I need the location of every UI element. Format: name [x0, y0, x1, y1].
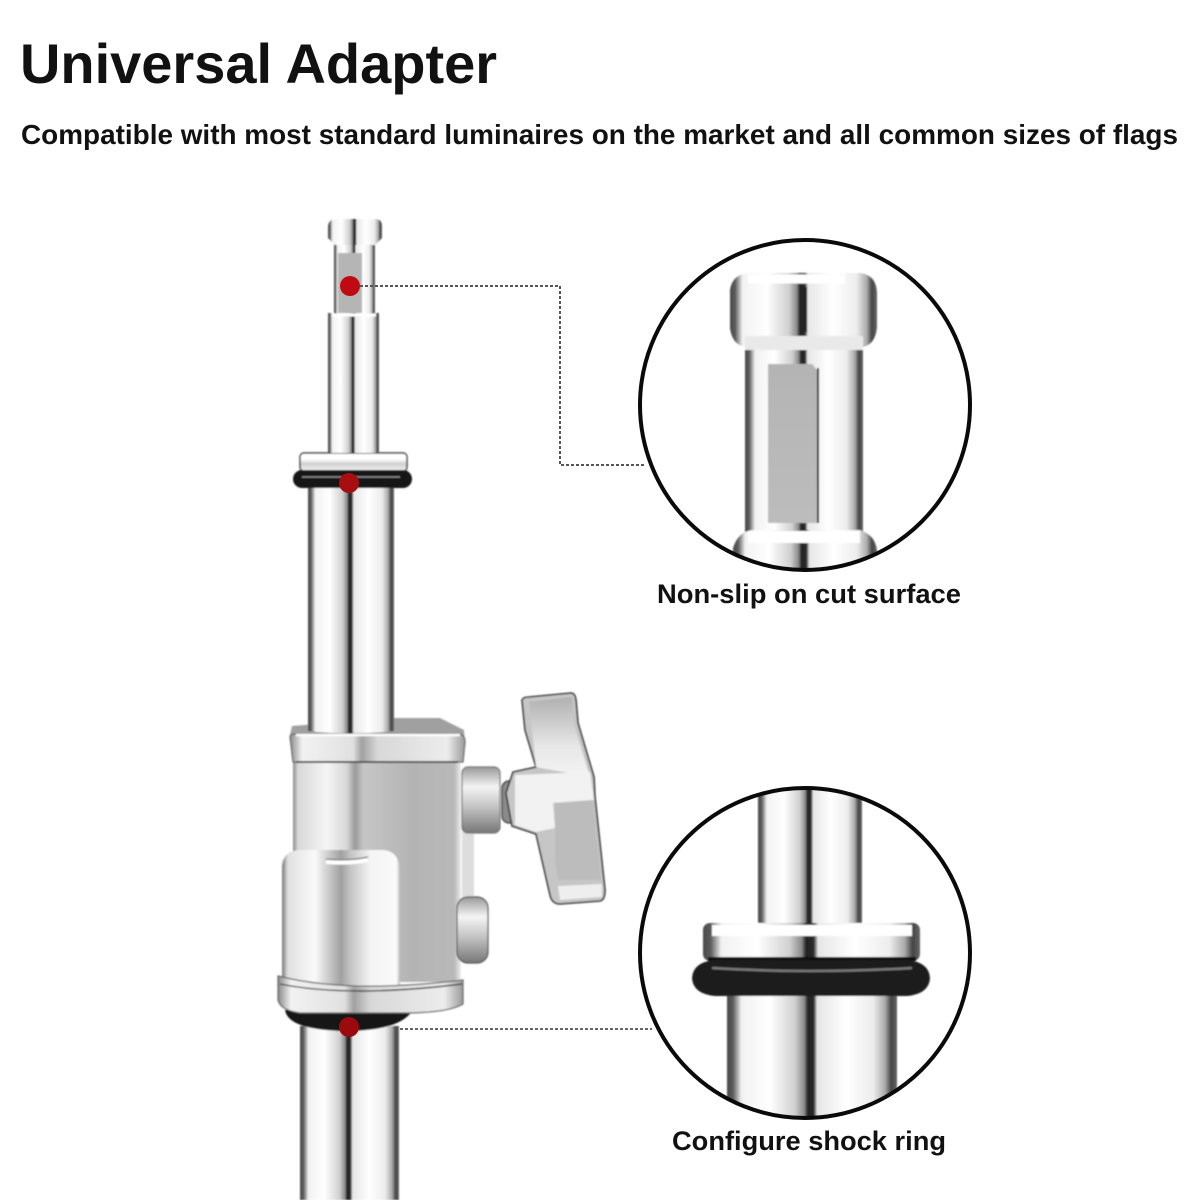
collar shadow: [296, 761, 458, 763]
center dark line: [804, 286, 808, 332]
spigot flat: [338, 253, 362, 313]
o-ring highlight: [712, 968, 912, 971]
tube over clamp top: [308, 700, 394, 734]
black o-ring: [692, 960, 930, 996]
clamp top surface: [290, 718, 465, 745]
detail circle: non-slip cut surface: [640, 240, 970, 575]
stand product illustration: [278, 219, 605, 1200]
red dot: o-ring: [339, 473, 359, 493]
o-ring highlight: [302, 476, 400, 478]
wing nut bottom lip: [558, 884, 602, 900]
circle white fill: [640, 788, 970, 1118]
title: Universal Adapter: [20, 32, 497, 95]
red dot: lower ring: [339, 1017, 359, 1037]
collar highlight: [296, 734, 460, 736]
knob neck: [462, 767, 500, 833]
dashed leader to lower detail: [400, 1028, 652, 1030]
dashed leader to top detail: [360, 286, 645, 465]
flat edge: [817, 368, 819, 523]
spigot shaft: [328, 313, 379, 453]
wing nut: [506, 693, 605, 904]
flange: [703, 923, 920, 961]
neck: [745, 345, 863, 540]
lower tube: [300, 1026, 399, 1200]
spigot enlargement: [730, 273, 877, 575]
flange top highlight: [712, 925, 912, 936]
bottom flange: [732, 528, 878, 568]
wing nut hub: [515, 772, 594, 832]
upper tube: [308, 482, 394, 722]
head top highlight: [748, 274, 845, 284]
circle outline: [640, 240, 970, 570]
flange underside line: [708, 957, 916, 961]
upper tube: [758, 780, 862, 926]
small neck: [502, 781, 520, 823]
bottom collar: [278, 976, 463, 1013]
top flange: [300, 453, 407, 471]
cut flat: [768, 364, 817, 523]
clamp body: [293, 760, 461, 982]
wing nut lower face: [555, 800, 601, 880]
lump shoulder shadow: [326, 857, 368, 860]
spigot shoulder highlight: [332, 314, 376, 316]
strut: [462, 830, 474, 900]
subtitle: Compatible with most standard luminaires on the market and all common sizes of flags: [21, 119, 1178, 150]
clamp lower lump: [282, 850, 400, 985]
o-ring: [293, 470, 412, 488]
clamp top collar: [290, 734, 465, 762]
head lower highlight: [745, 336, 863, 350]
wing nut upper face: [529, 697, 590, 777]
lump highlight: [326, 860, 368, 863]
caption: shock ring: Configure shock ring: [672, 1126, 946, 1156]
lower bump: [457, 897, 488, 963]
red dot: spigot: [340, 276, 360, 296]
ring enlargement: [692, 780, 930, 1125]
head: [730, 273, 877, 347]
circle white fill: [640, 240, 970, 570]
spigot neck: [334, 243, 375, 314]
detail circle: shock ring: [640, 780, 970, 1125]
flange highlight: [748, 531, 860, 543]
lower tube: [727, 990, 897, 1125]
caption: non-slip: Non-slip on cut surface: [657, 579, 961, 609]
collar edge line: [280, 984, 462, 991]
circle outline: [640, 788, 970, 1118]
lower rubber ring: [285, 1010, 413, 1031]
spigot head: [328, 219, 382, 245]
